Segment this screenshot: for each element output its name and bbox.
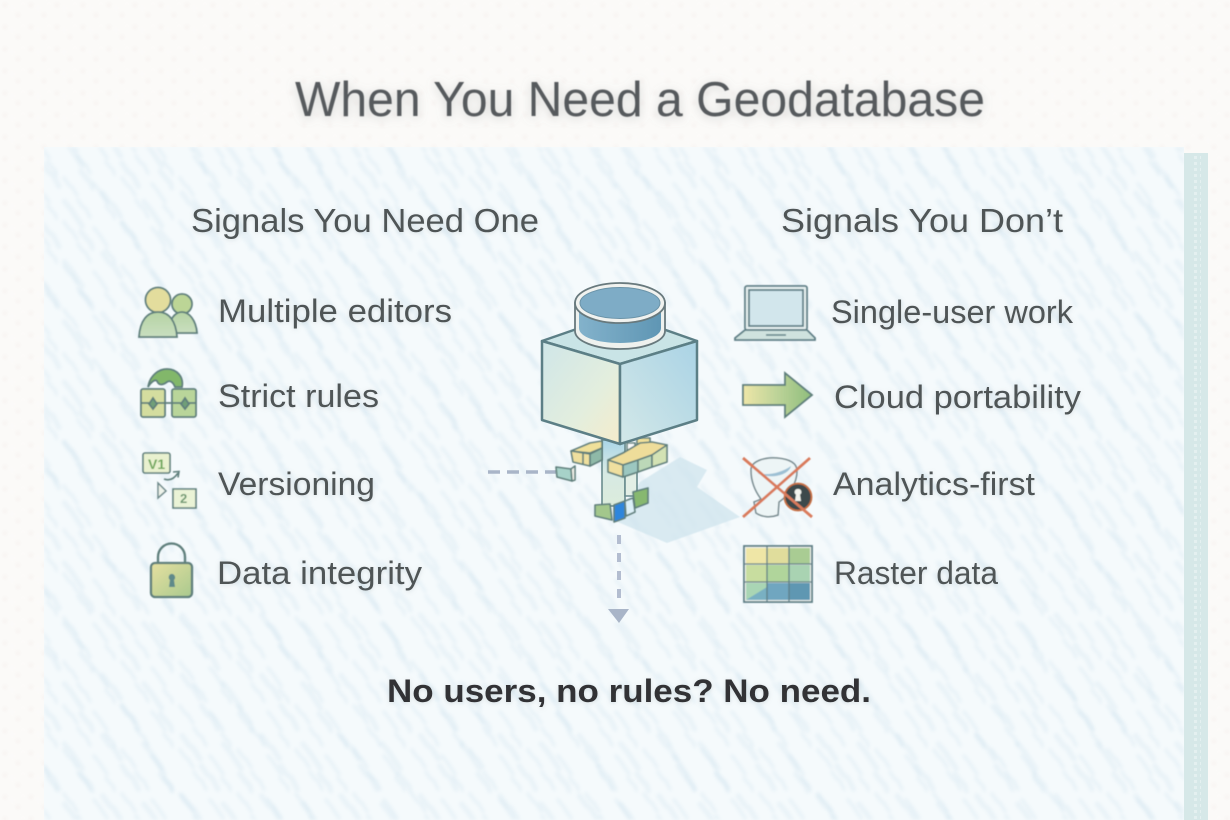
item: multiple editors (139, 288, 452, 337)
icon: crossed-out bowl (743, 458, 812, 517)
main panel (44, 147, 1184, 820)
icon: people (139, 288, 197, 337)
floor shadow (613, 457, 740, 543)
central illustration: database cube (488, 283, 740, 623)
right edge band (1184, 153, 1208, 820)
label: Data integrity (217, 555, 422, 591)
label: Strict rules (218, 378, 379, 414)
icon: versions (143, 453, 196, 508)
heading: signals you don't: Signals You Don’t (781, 202, 1063, 239)
label: Raster data (834, 555, 998, 591)
item: cloud portability (743, 373, 1081, 417)
item: analytics-first (743, 458, 1035, 517)
item: single-user work (735, 286, 1074, 340)
data stems (602, 440, 637, 506)
cylinder (575, 283, 665, 349)
icon: padlock (151, 544, 192, 597)
dashed arrow left (488, 470, 556, 474)
label: Cloud portability (834, 379, 1081, 415)
heading: signals you need one: Signals You Need One (191, 202, 539, 239)
cube (542, 314, 697, 444)
icon: raster grid (744, 546, 812, 602)
icon: versions: V1 (148, 456, 165, 472)
icon: arrow (743, 373, 812, 417)
dashed arrow down (608, 535, 629, 623)
title: When You Need a Geodatabase (295, 73, 985, 127)
label: Multiple editors (218, 293, 452, 329)
item: raster data (744, 546, 998, 602)
small cubes (556, 438, 667, 522)
icon: versions: 2 (180, 491, 187, 506)
item: data integrity (151, 544, 422, 597)
label: Single-user work (831, 294, 1074, 330)
label: Analytics-first (833, 466, 1035, 502)
icon: linked boxes (141, 369, 196, 417)
item: versioning (143, 453, 375, 508)
item: strict rules (141, 369, 379, 417)
icon: laptop (735, 286, 815, 340)
label: Versioning (218, 466, 375, 502)
conclusion: No users, no rules? No need. (387, 673, 871, 709)
